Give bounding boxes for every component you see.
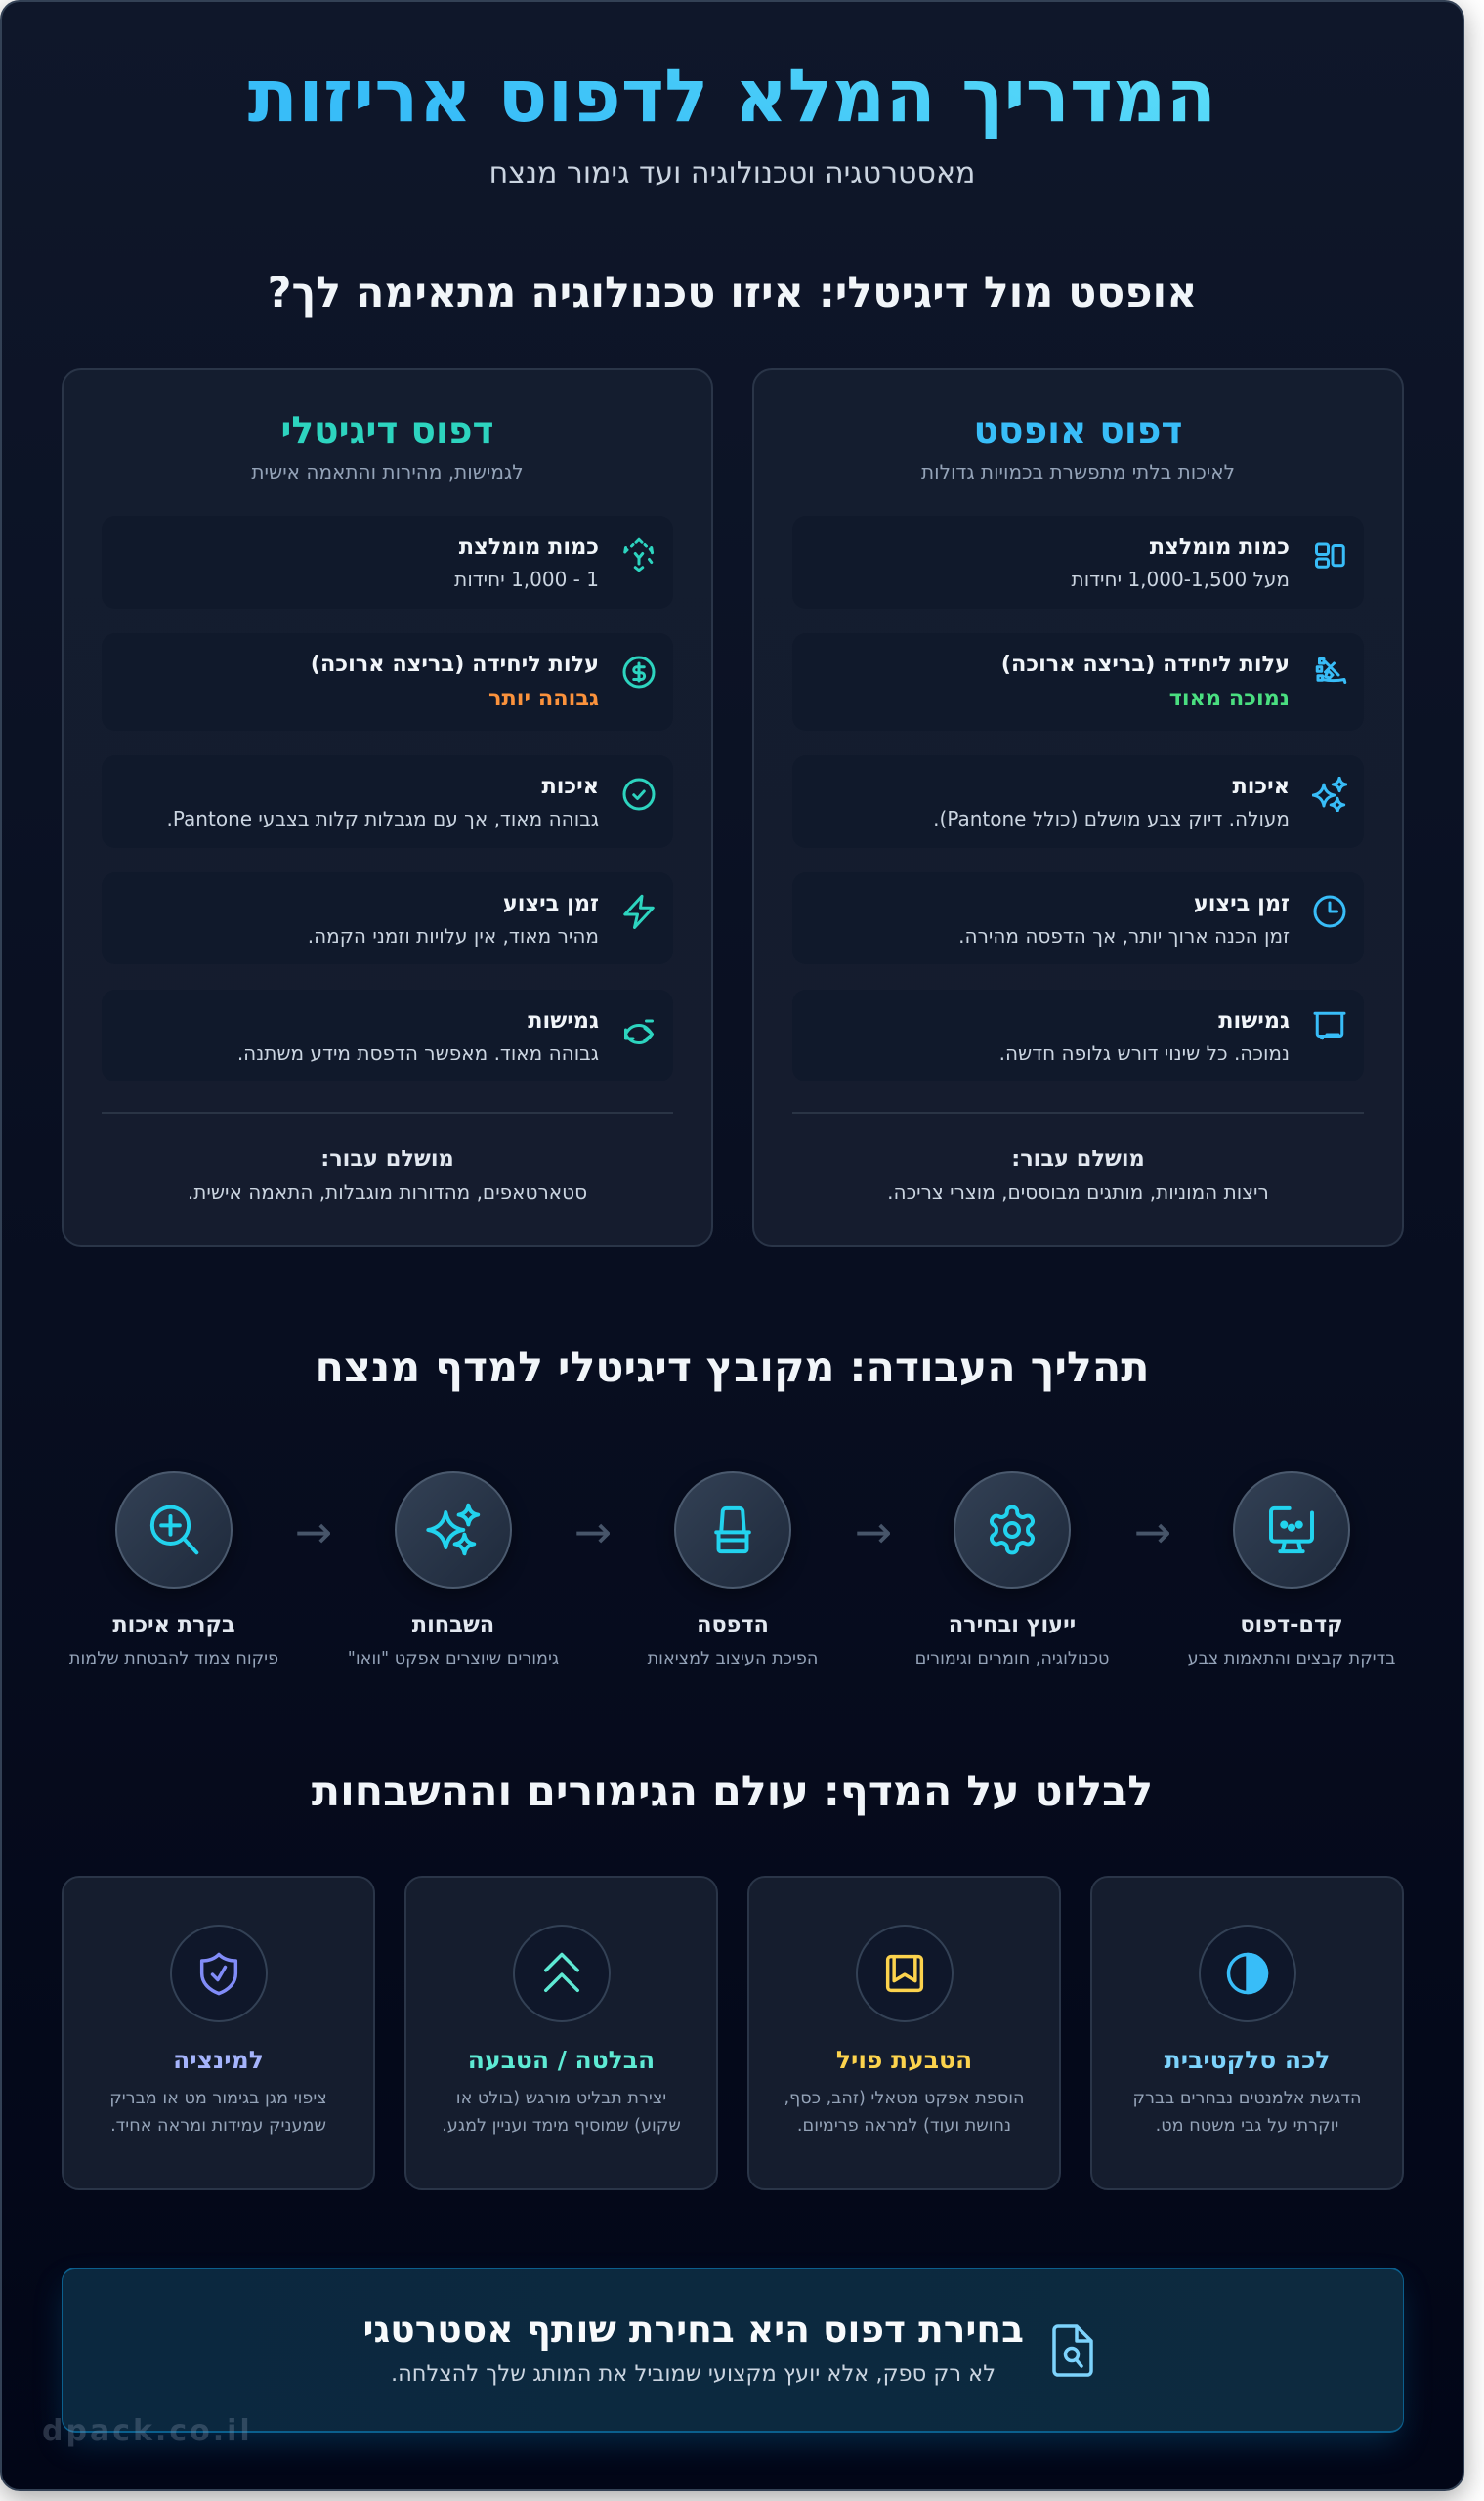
card description [1133, 2089, 1361, 2136]
card title: הטבעת פויל [836, 2046, 972, 2074]
row label: עלות ליחידה (בריצה ארוכה) [311, 652, 599, 677]
card title: למינציה [173, 2046, 264, 2074]
row value: זמן הכנה ארוך יותר, אך הדפסה מהירה. [958, 924, 1290, 948]
icon: double chevron [512, 1925, 610, 2022]
arrow: → [295, 1505, 332, 1558]
perfect for heading: מושלם עבור: [1011, 1146, 1145, 1171]
title [2, 52, 1463, 140]
card description: יוקרתי על גבי משטח מט. [1156, 2116, 1338, 2136]
icon: monitor [1233, 1471, 1350, 1589]
row: unit cost [102, 633, 673, 731]
callout subtitle: לא רק ספק, אלא יועץ מקצועי שמוביל את המותג שלך להצלחה. [391, 2361, 996, 2387]
card description: הדגשת אלמנטים נבחרים בברק [1133, 2089, 1361, 2108]
row label: כמות מומלצת [459, 534, 599, 560]
row value: נמוכה. כל שינוי דורש גלופה חדשה. [999, 1041, 1290, 1065]
row value: נמוכה מאוד [1169, 686, 1290, 711]
step title: השבחות [412, 1612, 494, 1637]
row: turnaround [792, 872, 1364, 964]
icon: check circle [623, 778, 655, 811]
arrow: → [855, 1505, 892, 1558]
digital panel heading: דפוס דיגיטלי [280, 408, 494, 451]
step description: גימורים שיוצרים אפקט "וואו" [348, 1649, 559, 1669]
row label: זמן ביצוע [503, 891, 599, 916]
icon: sparkles [395, 1471, 512, 1589]
step description: בדיקת קבצים והתאמות צבע [1188, 1649, 1395, 1669]
digital panel subtitle: לגמישות, מהירות והתאמה אישית [251, 460, 524, 484]
icon: refresh eye [624, 1020, 655, 1044]
process step: prepress [1188, 1471, 1395, 1669]
row: quality [102, 755, 673, 848]
icon: bookmark [856, 1925, 954, 2022]
row value: גבוהה מאוד. מאפשר הדפסת מידע משתנה. [237, 1041, 599, 1065]
arrow: → [1134, 1505, 1171, 1558]
row: quality [792, 755, 1364, 848]
panel: offset printing [752, 368, 1404, 1247]
finish card: foil [747, 1876, 1061, 2190]
row value: 1 - 1,000 יחידות [454, 568, 599, 591]
icon: half circle [1198, 1925, 1295, 2022]
perfect for text: ריצות המוניות, מותגים מבוססים, מוצרי צריכה. [887, 1180, 1269, 1204]
row label: איכות [541, 774, 599, 799]
row: recommended quantity [792, 516, 1364, 609]
row label: כמות מומלצת [1150, 534, 1290, 560]
row: turnaround [102, 872, 673, 964]
card description: שקוע) שמוסיף מימד ועניין למגע. [442, 2116, 681, 2136]
card description: נחושת ועוד) למראה פרימיום. [797, 2116, 1011, 2136]
row label: גמישות [1218, 1008, 1290, 1034]
card description [442, 2089, 681, 2136]
card title: הבלטה / הטבעה [468, 2046, 655, 2074]
card description: שמעניק עמידות ומראה אחיד. [110, 2116, 326, 2136]
finish card: lamination [62, 1876, 375, 2190]
row value: מעל 1,000-1,500 יחידות [1072, 568, 1290, 591]
heading: process: תהליך העבודה: מקובץ דיגיטלי למדף מנצח [316, 1343, 1149, 1392]
offset panel subtitle: לאיכות בלתי מתפשרת בכמויות גדולות [921, 460, 1235, 484]
icon: dashed arrows [623, 537, 655, 572]
row value: גבוהה יותר [488, 686, 599, 711]
arrow: → [574, 1505, 612, 1558]
row value: מעולה. דיוק צבע מושלם (כולל Pantone). [933, 807, 1290, 830]
icon: gear [954, 1471, 1071, 1589]
card title: לכה סלקטיבית [1165, 2046, 1330, 2074]
finish card: selective varnish [1090, 1876, 1404, 2190]
icon: cost [1315, 657, 1346, 684]
finish card: embossing [404, 1876, 718, 2190]
icon: tray [1313, 1012, 1346, 1039]
icon: shield [170, 1925, 268, 2022]
row: flexibility [102, 990, 673, 1081]
step description: הפיכת העיצוב למציאות [648, 1649, 818, 1669]
row: flexibility [792, 990, 1364, 1081]
heading: finishes: לבלוט על המדף: עולם הגימורים וההשבחות [312, 1767, 1153, 1816]
process step: consulting [915, 1471, 1109, 1669]
icon: bolt [623, 895, 655, 929]
step title: בקרת איכות [112, 1612, 235, 1637]
card description: ציפוי מגן בגימור מט או מבריק [109, 2089, 327, 2108]
step title: הדפסה [697, 1612, 769, 1637]
title: המדריך המלא לדפוס אריזות [248, 53, 1216, 139]
process step: printing [647, 1471, 818, 1669]
icon: layout blocks [1315, 543, 1345, 569]
process step: quality control [69, 1471, 278, 1669]
perfect for text: סטארטאפים, מהדורות מוגבלות, התאמה אישית. [188, 1180, 587, 1204]
offset panel heading: דפוס אופסט [974, 408, 1182, 451]
card description: הוספת אפקט מטאלי (זהב, כסף, [784, 2089, 1025, 2108]
row label: גמישות [528, 1008, 599, 1034]
icon: sparkles [1312, 777, 1347, 812]
row label: זמן ביצוע [1194, 891, 1290, 916]
watermark: dpack.co.il [42, 2414, 253, 2448]
card description [109, 2089, 327, 2136]
process step: enhancements [348, 1471, 559, 1669]
step title: קדם-דפוס [1240, 1612, 1343, 1637]
icon: file search [1052, 2324, 1093, 2377]
perfect for heading: מושלם עבור: [320, 1146, 454, 1171]
row value: מהיר מאוד, אין עלויות וזמני הקמה. [308, 924, 599, 948]
step title: ייעוץ ובחירה [949, 1612, 1076, 1637]
step description: טכנולוגיה, חומרים וגימורים [915, 1649, 1109, 1669]
callout title: בחירת דפוס היא בחירת שותף אסטרטגי [362, 2308, 1024, 2351]
icon: magnifier [115, 1471, 233, 1589]
card description [784, 2089, 1025, 2136]
row value: גבוהה מאוד, אך עם מגבלות קלות בצבעי Pantone. [167, 807, 599, 830]
callout: strategic partner [62, 2268, 1404, 2433]
icon: clock [1313, 895, 1346, 928]
heading: offset vs digital: אופסט מול דיגיטלי: איזו טכנולוגיה מתאימה לך? [268, 269, 1197, 318]
row label: עלות ליחידה (בריצה ארוכה) [1001, 652, 1290, 677]
row: recommended quantity [102, 516, 673, 609]
step description: פיקוח צמוד להבטחת שלמות [69, 1649, 278, 1669]
subtitle: מאסטרטגיה וטכנולוגיה ועד גימור מנצח [489, 156, 975, 191]
row label: איכות [1232, 774, 1290, 799]
row: unit cost [792, 633, 1364, 731]
panel: digital printing [62, 368, 713, 1247]
icon: print stack [674, 1471, 791, 1589]
card description: יצירת תבליט מורגש (בולט או [456, 2089, 666, 2108]
icon: dollar [623, 657, 655, 688]
